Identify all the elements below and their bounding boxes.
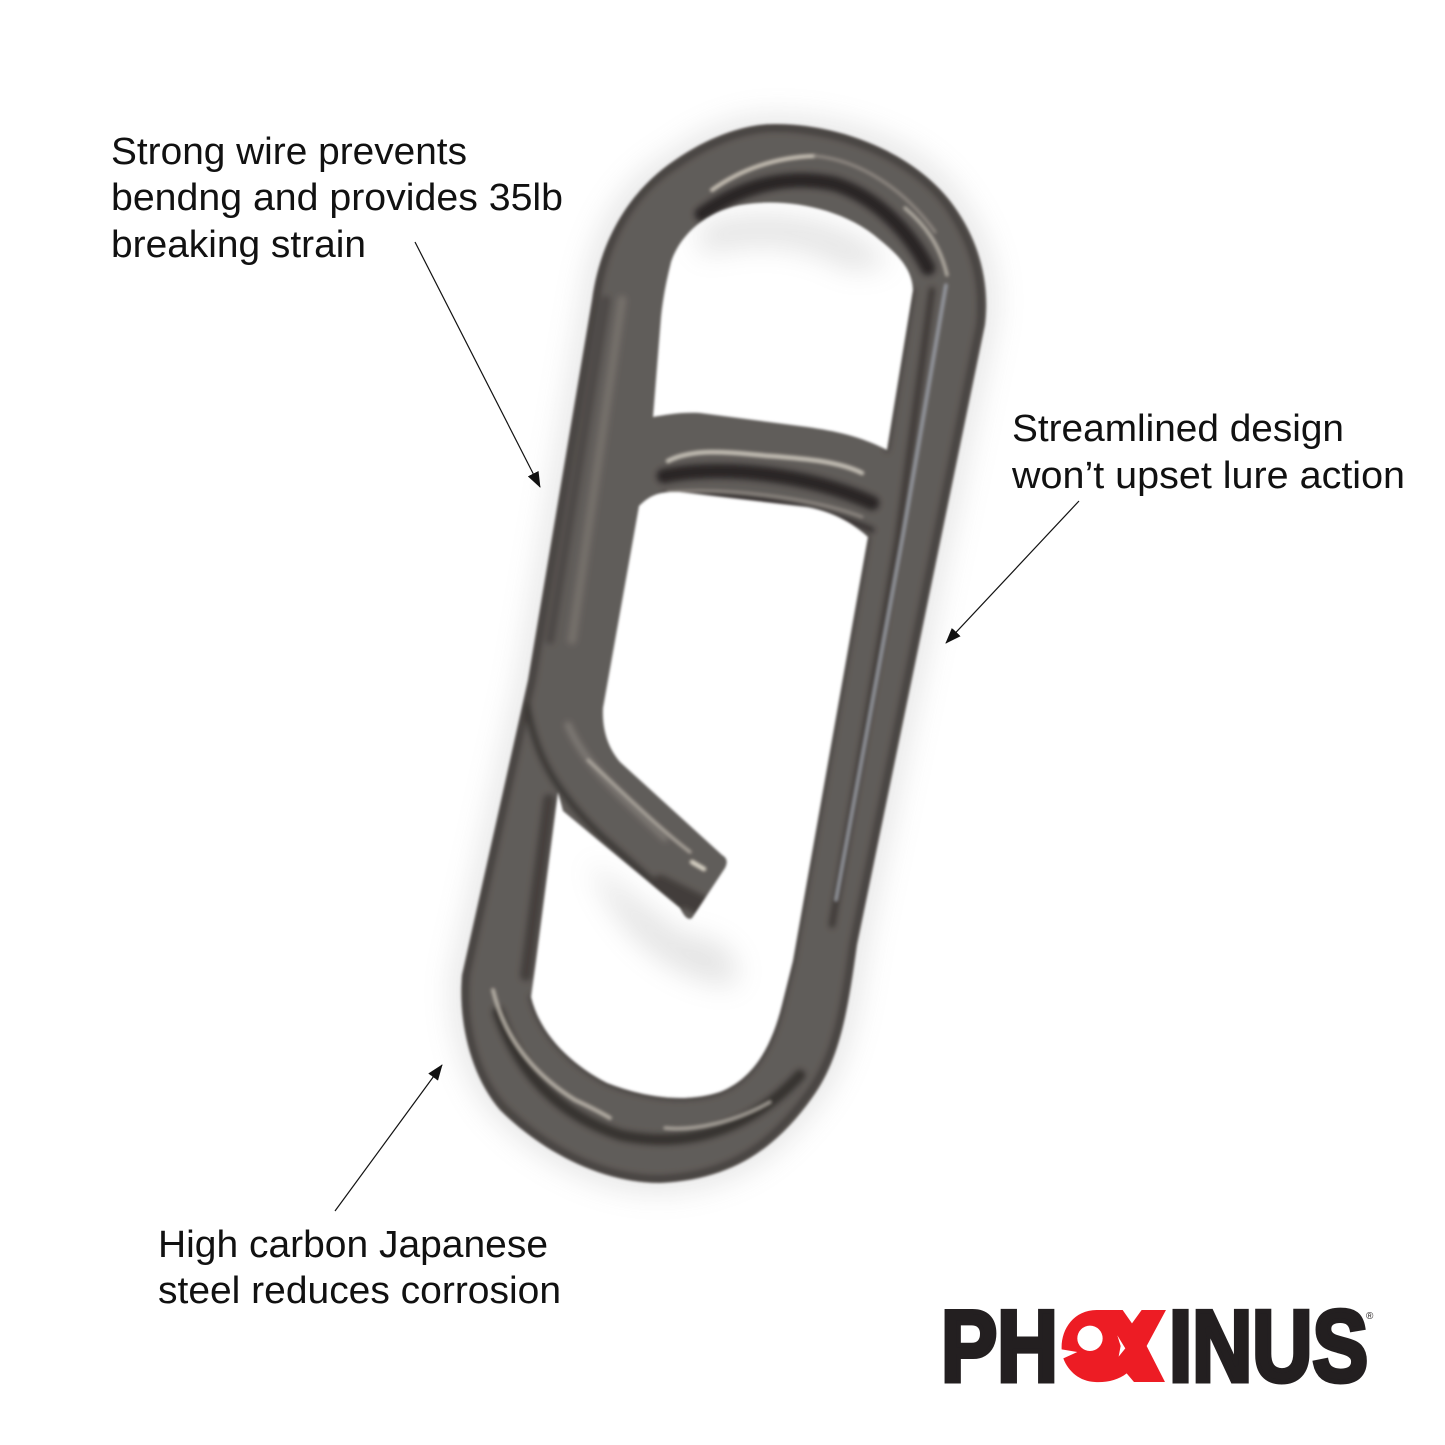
logo: Phoxinus: INUS [1169,1291,1368,1403]
callout: high carbon steel [158,1224,561,1312]
arrow: strong wire [415,242,540,487]
wire shading [465,128,981,1179]
logo: Phoxinus [941,1291,1374,1403]
callout: streamlined design: won’t upset lure action [1011,455,1405,497]
callout: high carbon steel: High carbon Japanese [158,1224,548,1266]
callout: streamlined design: Streamlined design [1012,408,1344,450]
arrow: streamlined design [946,501,1079,643]
logo: Phoxinus: ® [1366,1311,1374,1322]
arrow: high carbon steel [335,1065,442,1211]
callout: strong wire [111,131,563,266]
icon: red fish [1062,1310,1166,1382]
clip body [461,124,986,1183]
background shadow around clip [466,130,982,1178]
callout: strong wire: breaking strain [111,224,366,266]
callout: streamlined design [1011,408,1405,497]
callout: strong wire: bendng and provides 35lb [111,177,563,219]
wire highlights [493,156,947,1129]
callout: high carbon steel: steel reduces corrosion [158,1270,561,1312]
metal clip photo [461,124,986,1183]
callout: strong wire: Strong wire prevents [111,131,467,173]
logo: Phoxinus: PH [941,1291,1058,1403]
